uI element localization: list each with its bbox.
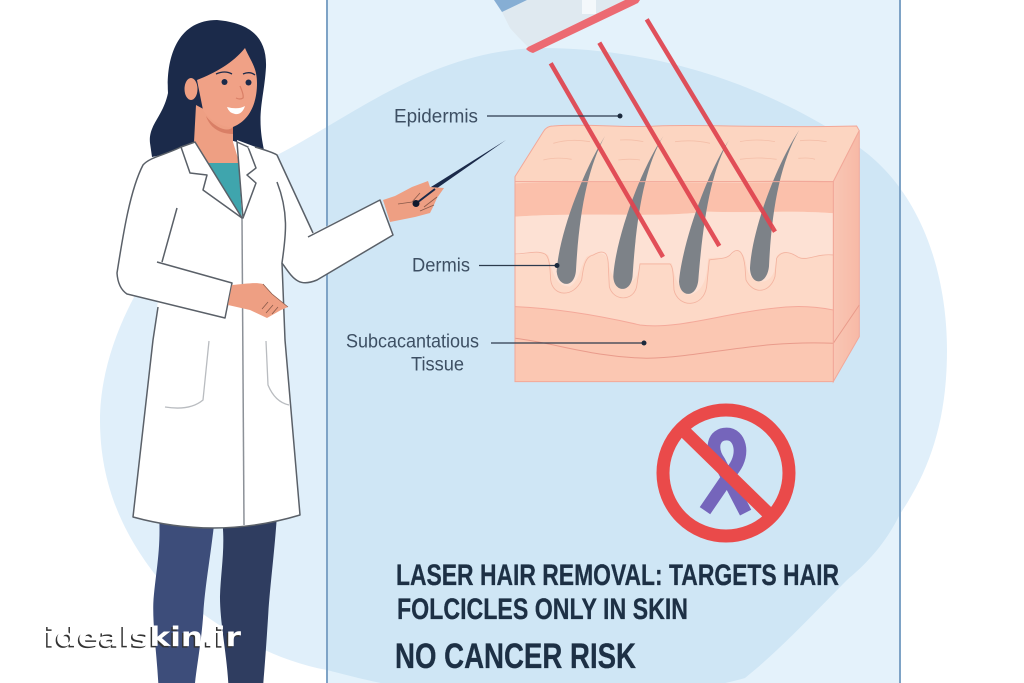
pointing arm sleeve bbox=[248, 147, 393, 283]
subcutaneous layer bbox=[515, 306, 833, 382]
neck bbox=[194, 105, 240, 165]
pointing hand bbox=[383, 181, 444, 222]
left arm outline bbox=[117, 147, 232, 318]
right lapel bbox=[237, 142, 256, 218]
coat centre line bbox=[242, 218, 244, 525]
lower hand bbox=[228, 283, 288, 318]
doctor figure bbox=[117, 20, 506, 683]
icon: no cancer ribbon bbox=[663, 410, 789, 536]
coat body bbox=[133, 140, 313, 528]
upper dark layer bbox=[515, 182, 833, 217]
shirt bbox=[208, 163, 242, 218]
coat side and hem outline bbox=[133, 263, 300, 528]
laser handpiece bbox=[494, 0, 640, 53]
front face bbox=[515, 182, 833, 382]
left lapel bbox=[181, 142, 242, 218]
label: Dermis: Dermis bbox=[412, 254, 470, 276]
watermark: idealskin.ir bbox=[45, 622, 242, 653]
red tip band bbox=[526, 0, 640, 53]
label: Epidermis bbox=[394, 106, 622, 128]
brows, eyes and nose bbox=[216, 72, 255, 99]
panel: skin diagram background bbox=[326, 0, 901, 683]
left arm sleeve bbox=[117, 147, 232, 318]
headline: FOLCICLES ONLY IN SKIN bbox=[397, 593, 688, 626]
ear bbox=[184, 78, 198, 100]
watermark: idealskin.ir bbox=[44, 624, 240, 654]
label: Epidermis: Epidermis bbox=[394, 106, 478, 128]
label: Subcacantatious Tissue: Tissue bbox=[411, 354, 464, 376]
label: Subcacantatious Tissue: Subcacantatious bbox=[346, 330, 479, 352]
ribbon bbox=[705, 434, 746, 513]
headline: LASER HAIR REMOVAL: TARGETS HAIR bbox=[396, 559, 839, 592]
pointer bbox=[431, 140, 506, 191]
legs bbox=[153, 520, 277, 683]
hair bbox=[150, 20, 266, 157]
label: Subcacantatious Tissue bbox=[346, 330, 646, 376]
background blob bbox=[100, 48, 947, 683]
hair follicles bbox=[557, 130, 799, 294]
left pocket bbox=[165, 341, 209, 408]
label: Dermis bbox=[412, 254, 560, 276]
top surface bbox=[515, 125, 859, 182]
headline bbox=[395, 559, 839, 676]
follicle outlines bbox=[515, 250, 833, 303]
side face bbox=[833, 131, 859, 382]
pointing arm outline bbox=[255, 147, 393, 283]
face bbox=[197, 48, 257, 127]
skin cross-section diagram bbox=[515, 125, 859, 382]
neck shadow bbox=[206, 116, 233, 134]
handpiece blue top bbox=[494, 0, 527, 12]
surface creases bbox=[543, 140, 827, 160]
right pocket bbox=[266, 341, 289, 405]
laser beams bbox=[551, 19, 775, 257]
smile bbox=[227, 106, 245, 114]
no cancer risk message: NO CANCER RISK bbox=[395, 637, 636, 676]
light epidermal layer bbox=[515, 212, 833, 295]
white stripe bbox=[582, 0, 596, 14]
